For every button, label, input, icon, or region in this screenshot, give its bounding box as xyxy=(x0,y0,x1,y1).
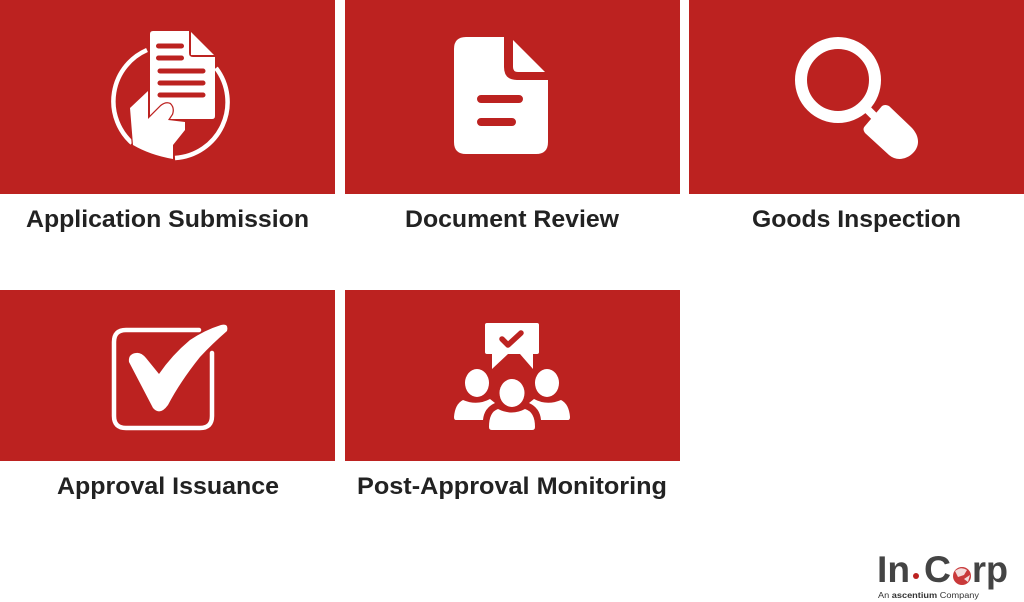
icon: document xyxy=(454,37,548,154)
panel: goods inspection xyxy=(689,0,1024,194)
heading: application submission: Application Submission xyxy=(26,206,309,233)
heading: post-approval monitoring: Post-Approval Monitoring xyxy=(357,473,667,500)
panel: application submission xyxy=(0,0,335,194)
logo: InCorp: rp xyxy=(972,549,1008,590)
icon: checkbox with tick xyxy=(114,325,227,428)
panel: post-approval monitoring xyxy=(345,290,680,461)
logo: InCorp: An ascentium Company xyxy=(878,591,979,600)
logo: InCorp xyxy=(877,549,1008,600)
heading: approval issuance: Approval Issuance xyxy=(57,473,279,500)
heading: document review: Document Review xyxy=(405,206,620,233)
icon: magnifying glass xyxy=(801,43,918,159)
logo: InCorp: C xyxy=(924,549,951,590)
icon: hand holding document in circle xyxy=(113,31,228,159)
logo: InCorp: In xyxy=(877,549,910,590)
heading: goods inspection: Goods Inspection xyxy=(752,206,961,233)
icon: globe xyxy=(953,567,971,585)
panel: approval issuance xyxy=(0,290,335,461)
panel: document review xyxy=(345,0,680,194)
icon: team with speech bubble xyxy=(454,323,570,430)
